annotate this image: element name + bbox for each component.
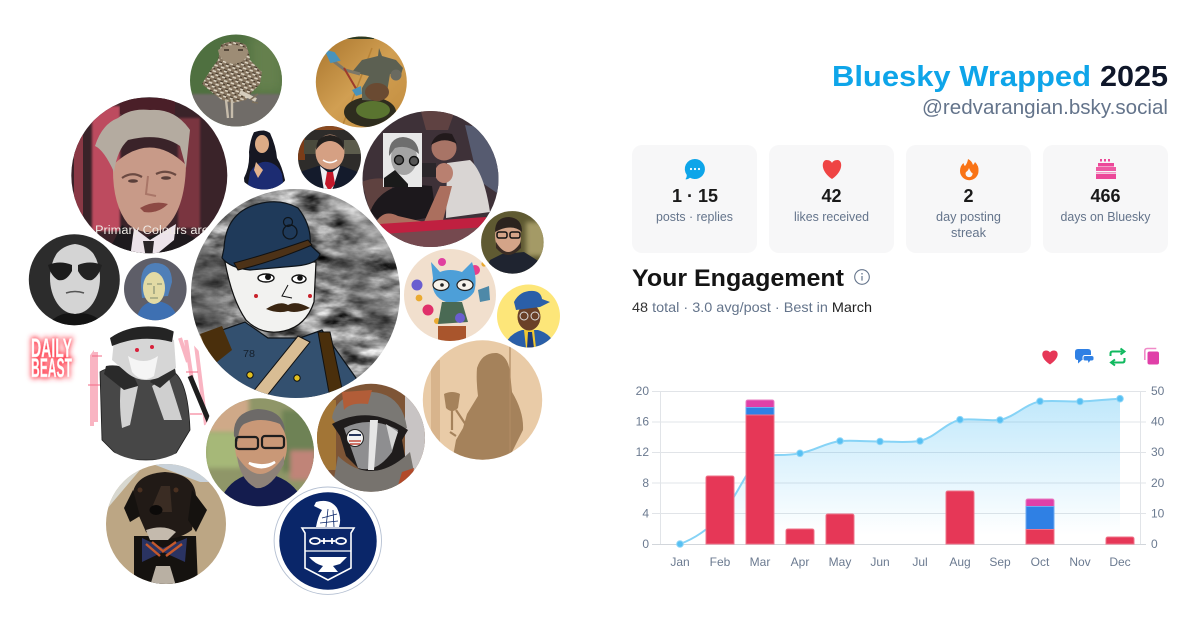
stat card: posts and replies: posts · replies <box>656 210 733 224</box>
left axis labels: 8 <box>642 476 649 490</box>
stat card: day posting streak: day posting <box>936 210 1001 224</box>
left axis labels: 16 <box>636 414 649 428</box>
eyes and mustache <box>258 274 274 282</box>
avatar: dog with bow tie <box>105 463 227 586</box>
right axis labels: 40 <box>1151 414 1165 428</box>
avatar: painted miniature <box>315 34 408 129</box>
stat card: day posting streak: 2 <box>963 186 974 206</box>
month labels: Sep <box>989 555 1011 569</box>
legend: reposts <box>1110 348 1124 366</box>
title: Bluesky Wrapped <box>832 61 1091 93</box>
legend: likes heart <box>1042 350 1058 364</box>
stat card: days on Bluesky: days on Bluesky <box>1060 210 1151 224</box>
month labels <box>670 555 1131 569</box>
anvil <box>309 557 347 572</box>
subtitle in image: Primary Colours are t <box>95 225 217 237</box>
left axis labels: 4 <box>642 506 649 520</box>
icon: flame <box>960 159 979 180</box>
collar number: 78 <box>243 349 255 360</box>
icon: speech bubble <box>685 159 705 179</box>
avatar: navy crest logo <box>274 487 381 594</box>
handle: @redvarangian.bsky.social <box>922 96 1168 119</box>
avatar: owl <box>188 34 284 130</box>
avatar: soldier meme on rocky background <box>190 188 402 402</box>
right axis labels <box>1151 384 1165 551</box>
bars <box>706 400 1134 544</box>
right axis labels: 0 <box>1151 537 1158 551</box>
stat card: likes received: likes received <box>794 210 869 224</box>
stat card: day posting streak: streak <box>951 226 987 240</box>
stat card: days on Bluesky <box>1043 145 1168 253</box>
heading: your engagement: Your Engagement <box>632 265 844 292</box>
month labels: Mar <box>750 555 770 569</box>
cumulative line <box>680 399 1120 544</box>
engagement summary: 48 total · 3.0 avg/post · Best in March <box>632 299 872 315</box>
avatar: man with glasses <box>480 210 546 276</box>
right axis labels: 20 <box>1151 476 1165 490</box>
stat card: posts and replies <box>632 145 757 253</box>
month labels: Oct <box>1031 555 1050 569</box>
left axis labels: 12 <box>636 445 649 459</box>
face <box>225 262 316 332</box>
avatar: space helmet with sticker <box>316 383 427 493</box>
right axis labels: 10 <box>1151 506 1165 520</box>
text: BEAST <box>31 353 72 383</box>
stat card: likes received <box>769 145 894 253</box>
title: 2025 <box>1100 61 1168 93</box>
month labels: Nov <box>1069 555 1091 569</box>
stat card: likes received: 42 <box>821 186 842 206</box>
avatar: wrestler with pasted portrait <box>362 108 500 250</box>
avatar: Daily Beast neon logo: DAILY <box>31 333 72 363</box>
chart legend <box>1042 348 1159 366</box>
text: BEAST <box>31 353 72 383</box>
left axis labels: 0 <box>642 537 649 551</box>
month labels: Apr <box>791 555 809 569</box>
stat card: days on Bluesky: 466 <box>1090 186 1121 206</box>
avatar: person in sunglasses black and white <box>28 233 122 327</box>
stat card: posts and replies: 1 · 15 <box>672 186 718 206</box>
month labels: Jul <box>912 555 928 569</box>
left axis labels: 20 <box>636 384 649 398</box>
avatar: blue cat with glasses <box>403 248 497 344</box>
uniform <box>200 321 357 398</box>
grid <box>652 391 1146 544</box>
month labels: Jun <box>870 555 890 569</box>
avatar: woman in navy jacket <box>244 130 285 190</box>
chain <box>310 538 346 544</box>
legend: replies <box>1075 349 1094 364</box>
right axis labels: 30 <box>1151 445 1165 459</box>
line points <box>677 395 1123 547</box>
month labels: Jan <box>670 555 690 569</box>
pasted portrait <box>383 133 422 187</box>
avatar: smiling man with glasses <box>205 398 316 508</box>
month labels: Aug <box>949 555 971 569</box>
avatar: blue painted portrait <box>123 256 189 322</box>
avatar: cartoon man on yellow <box>496 284 562 350</box>
avatar: man in suit with red tie <box>297 125 363 191</box>
combined chart <box>636 384 1165 569</box>
avatar: Daily Beast neon logo <box>31 333 72 383</box>
icon: heart <box>823 160 841 179</box>
avatar: man with grey hair and subtitle <box>70 96 230 258</box>
cumulative area <box>680 399 1120 544</box>
left axis labels <box>636 384 649 551</box>
month labels: Dec <box>1109 555 1131 569</box>
right axis labels: 50 <box>1151 384 1165 398</box>
avatar: Daily Beast neon logo: DAILY <box>31 333 72 363</box>
avatar: shadow of woman with wine glass <box>422 339 544 462</box>
month labels: Feb <box>710 555 731 569</box>
stat card: day posting streak <box>906 145 1031 253</box>
helmet <box>222 202 320 270</box>
legend: quotes <box>1145 348 1159 364</box>
avatar: anime character in grey hoodie <box>88 326 210 460</box>
icon: info <box>855 270 869 284</box>
month labels: May <box>829 555 851 569</box>
crest eagle <box>314 501 340 527</box>
icon: cake <box>1096 159 1116 179</box>
crest shield <box>302 528 354 580</box>
